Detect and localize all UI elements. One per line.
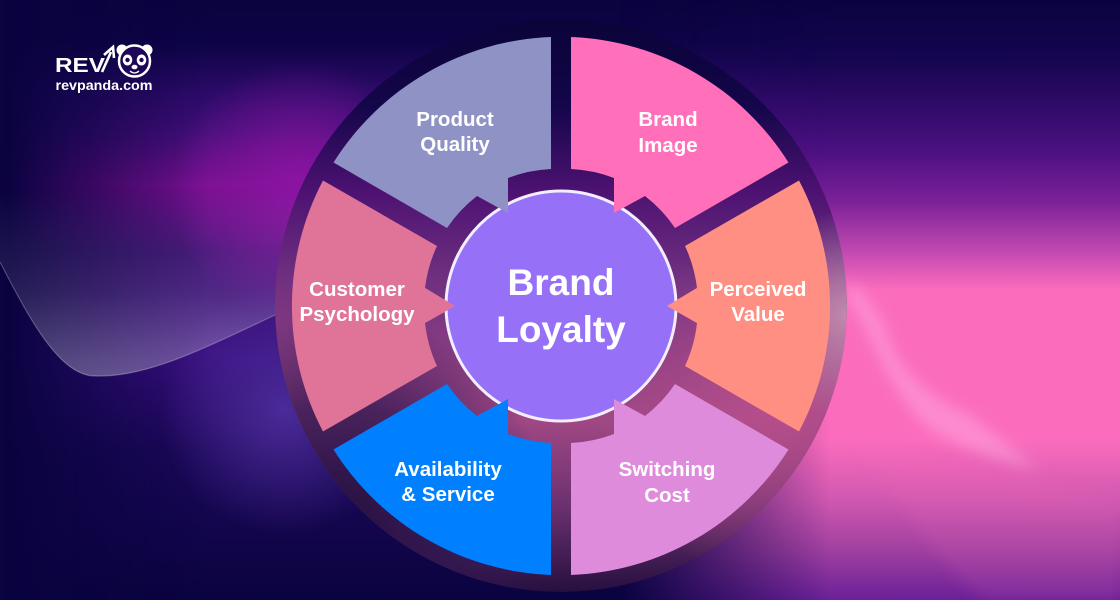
center circle: brand loyalty xyxy=(425,178,697,434)
panel: product quality xyxy=(334,37,551,228)
arrow tips over center ring xyxy=(425,178,697,434)
panel: product quality: Product xyxy=(416,108,494,131)
panel: brand image: Image xyxy=(638,134,698,157)
panel: product quality: Quality xyxy=(420,133,490,156)
panel: brand image xyxy=(571,37,788,228)
panel: switching cost: Switching xyxy=(619,458,715,481)
panel: customer psychology: Psychology xyxy=(299,303,415,326)
panel: switching cost: Cost xyxy=(644,484,690,507)
logo: revpanda xyxy=(55,44,152,93)
logo url: revpanda.com xyxy=(56,77,152,93)
panel: customer psychology xyxy=(292,180,455,432)
panel: availability and service: Availability xyxy=(394,458,502,481)
center circle: brand loyalty: Brand xyxy=(508,262,614,303)
panel: perceived value: Perceived xyxy=(710,278,806,301)
wheel xyxy=(275,20,847,592)
center circle: brand loyalty: Loyalty xyxy=(496,309,626,350)
icon: panda head xyxy=(116,44,152,76)
wheel outer ring xyxy=(275,20,847,592)
panel: perceived value xyxy=(667,180,830,432)
panel: availability and service: & Service xyxy=(401,483,495,506)
panel: customer psychology: Customer xyxy=(309,278,405,301)
panel: perceived value: Value xyxy=(731,303,785,326)
logo wordmark REV: REV xyxy=(55,55,106,77)
panel: brand image: Brand xyxy=(638,108,698,131)
panel: switching cost xyxy=(571,384,788,575)
logo arrow xyxy=(102,47,114,72)
panel: availability and service xyxy=(334,384,551,575)
